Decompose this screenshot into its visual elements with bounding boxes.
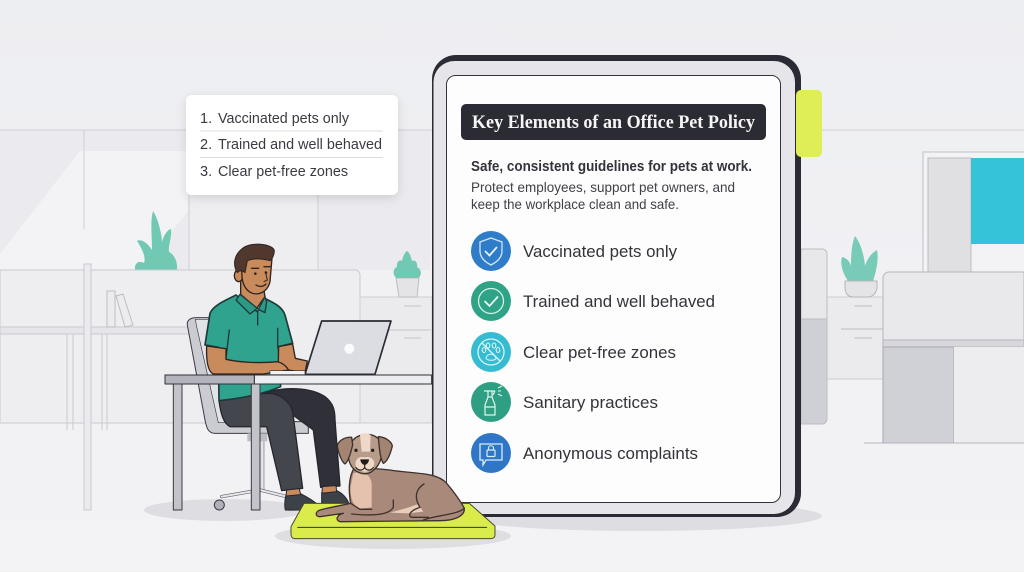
description [471, 179, 735, 212]
arms [207, 346, 288, 374]
trousers [219, 389, 340, 491]
office window and wall lines [0, 130, 1024, 270]
item: anonymous [471, 433, 698, 473]
item: pet-free zones: Clear pet-free zones [523, 343, 676, 362]
numbered callout card: Trained and well behaved [218, 137, 382, 153]
office chair [187, 318, 308, 510]
facial features [252, 267, 270, 286]
desk [254, 375, 432, 384]
item: trained [471, 281, 715, 321]
numbered callout card [186, 95, 398, 195]
numbered callout card: 2. [200, 137, 212, 153]
laptop [305, 321, 391, 374]
books on shelf [107, 291, 133, 327]
item: vaccinated: Vaccinated pets only [523, 242, 677, 261]
neck and face [241, 280, 265, 308]
subheading: Safe, consistent guidelines for pets at work. [471, 159, 752, 175]
dog body [316, 433, 464, 522]
item: pet-free zones [471, 332, 676, 372]
left partition and shelf [0, 264, 376, 510]
left cabinet with plant [360, 251, 432, 423]
title banner: Key Elements of an Office Pet Policy [472, 112, 755, 133]
yellow tab [796, 90, 822, 157]
numbered callout card: 3. [200, 164, 212, 180]
numbered callout card: Vaccinated pets only [218, 111, 350, 127]
description: keep the workplace clean and safe. [471, 196, 679, 212]
right background: window, partition and cabinet [801, 152, 1024, 443]
item: vaccinated [471, 231, 677, 271]
title banner [461, 104, 766, 140]
floor shadows [144, 499, 822, 549]
shoes [285, 486, 349, 510]
shirt [205, 295, 293, 401]
item: sanitary [471, 382, 658, 422]
item: anonymous: Anonymous complaints [523, 444, 698, 463]
person at desk with laptop [165, 244, 432, 510]
item: trained: Trained and well behaved [523, 292, 715, 311]
description: Protect employees, support pet owners, and [471, 179, 735, 195]
dog head [348, 434, 382, 474]
plant on right cabinet [841, 236, 878, 281]
policy tablet [432, 55, 822, 517]
numbered callout card: 1. [200, 111, 212, 127]
dog on yellow bed [291, 433, 495, 539]
hair [235, 244, 274, 273]
numbered callout card: Clear pet-free zones [218, 164, 348, 180]
collar [236, 294, 267, 314]
item: sanitary: Sanitary practices [523, 393, 658, 412]
yellow bed [291, 503, 495, 539]
plant behind partition [135, 211, 177, 270]
